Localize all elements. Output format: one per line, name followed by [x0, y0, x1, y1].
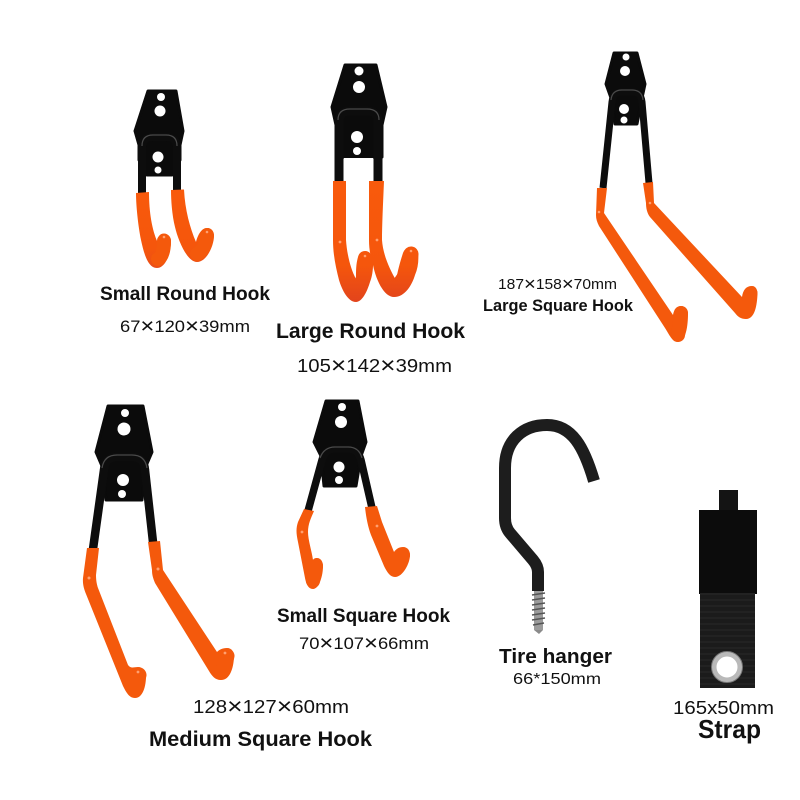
heading: large square hook: Large Square Hook: [483, 296, 634, 315]
panel: large round hook: [276, 65, 465, 378]
heading: medium square hook: Medium Square Hook: [149, 728, 372, 751]
heading: tire hanger: Tire hanger: [499, 646, 612, 668]
panel: strap: [673, 490, 774, 744]
icon: small square hook: [296, 401, 410, 589]
icon: tire hanger screw hook: [505, 425, 594, 634]
icon: medium square hook: [83, 406, 234, 698]
panel: medium square hook: [83, 406, 372, 751]
panel: small square hook: [277, 401, 450, 655]
heading: small round hook: Small Round Hook: [100, 283, 270, 305]
dimensions: small round hook: 67×120×39mm: [120, 314, 250, 338]
icon: small round hook: [135, 91, 214, 268]
dimensions: strap: 165x50mm: [673, 698, 774, 718]
icon: velcro strap with grommet: [699, 490, 757, 688]
panel: tire hanger: [499, 425, 612, 688]
heading: small square hook: Small Square Hook: [277, 605, 450, 627]
dimensions: large square hook: 187×158×70mm: [498, 273, 617, 294]
panel: small round hook: [100, 91, 270, 338]
dimensions: medium square hook: 128×127×60mm: [193, 693, 349, 719]
dimensions: large round hook: 105×142×39mm: [297, 352, 452, 378]
dimensions: tire hanger: 66*150mm: [513, 671, 601, 688]
dimensions: small square hook: 70×107×66mm: [299, 631, 429, 655]
heading: large round hook: Large Round Hook: [276, 320, 465, 343]
heading: strap: Strap: [698, 714, 761, 744]
icon: large round hook: [332, 65, 418, 302]
icon: large square hook: [596, 53, 758, 342]
panel: large square hook: [483, 53, 758, 342]
